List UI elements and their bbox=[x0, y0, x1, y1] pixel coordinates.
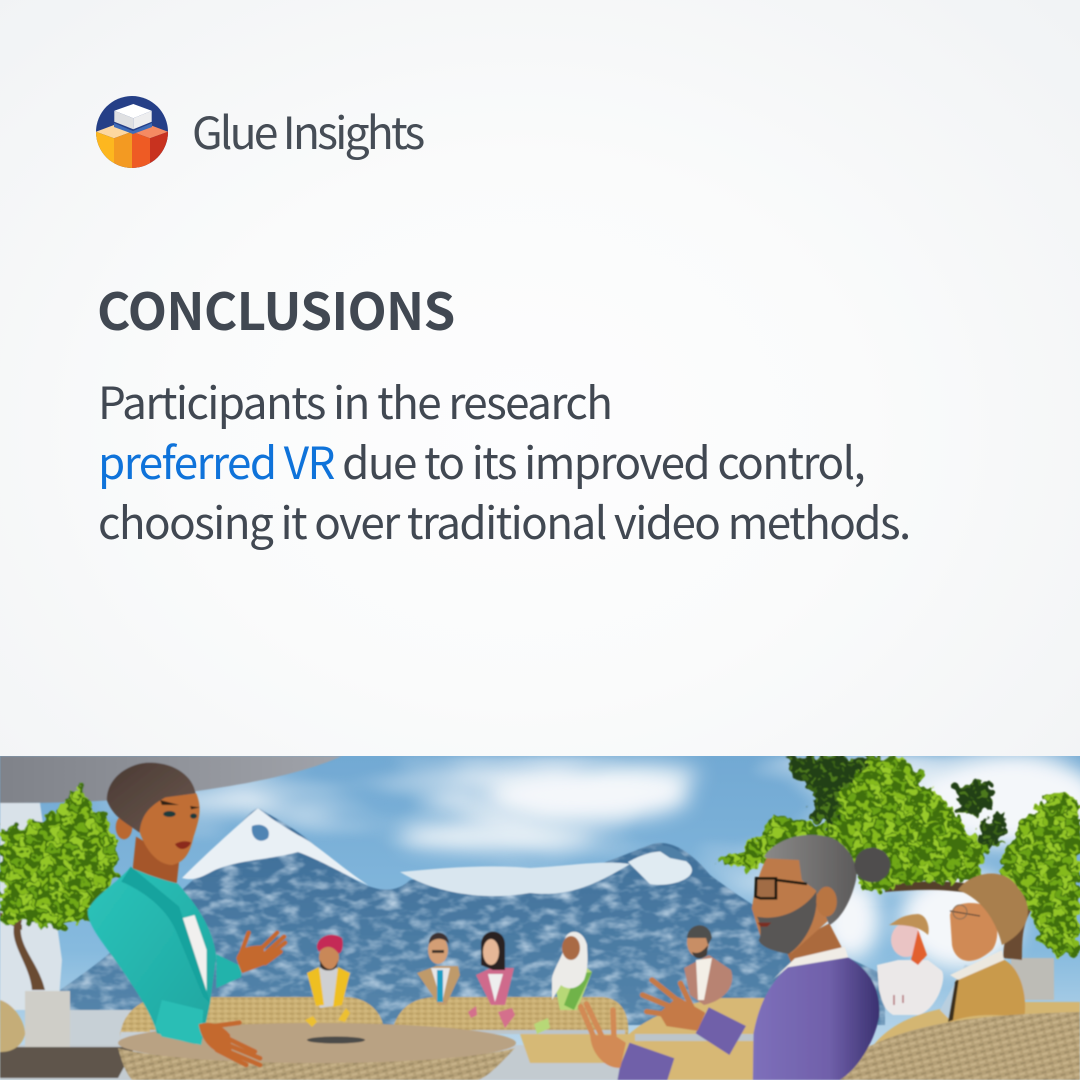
logo icon: Glue Insights cube bbox=[96, 96, 168, 168]
attendee: man with beard bbox=[684, 925, 732, 1005]
hair bbox=[764, 835, 856, 925]
illustration: VR meeting scene bbox=[0, 756, 1080, 1080]
mouth bbox=[758, 923, 771, 927]
heading: conclusions: CONCLUSIONS bbox=[97, 271, 455, 345]
ear bbox=[816, 887, 837, 917]
hair bbox=[107, 763, 196, 833]
attendee: woman in pink bbox=[468, 932, 515, 1028]
speaker: man with glasses and purple jacket bbox=[581, 835, 890, 1080]
wicker benches bbox=[120, 997, 1080, 1080]
right tree bbox=[718, 756, 1080, 960]
lower hand bbox=[200, 1023, 260, 1065]
sleeve 2 bbox=[617, 1043, 674, 1080]
right planter bbox=[1011, 958, 1054, 1000]
hand 2 bbox=[581, 1004, 624, 1067]
cuff lower bbox=[155, 1000, 203, 1045]
ceiling canopy bbox=[0, 756, 342, 803]
left wall bbox=[0, 803, 62, 1010]
bun bbox=[854, 848, 890, 882]
sky with clouds bbox=[0, 754, 1080, 1080]
body text: Participants in the research bbox=[98, 368, 611, 432]
upper hand bbox=[238, 933, 285, 972]
collar bbox=[772, 947, 848, 980]
lapel bbox=[121, 867, 210, 1003]
central table bbox=[118, 1023, 516, 1080]
hand 1 bbox=[643, 980, 704, 1029]
eyes and mouth bbox=[160, 800, 200, 849]
face bbox=[139, 793, 200, 865]
neck bbox=[133, 837, 179, 897]
face bbox=[752, 852, 833, 953]
low wall and floor bbox=[0, 1010, 1080, 1080]
sleeve 1 bbox=[696, 1007, 746, 1055]
foreground wicker bowl bbox=[820, 1012, 1080, 1080]
jacket bbox=[753, 957, 879, 1080]
body text: choosing it over traditional video methods. bbox=[98, 488, 910, 552]
attendee: woman in hijab bbox=[534, 932, 592, 1034]
blazer bbox=[88, 867, 216, 1044]
body text: preferred VR due to its improved control, bbox=[98, 428, 864, 492]
ear bbox=[116, 815, 132, 839]
wicker chair far left bbox=[0, 1000, 25, 1052]
left planter bbox=[25, 991, 70, 1047]
glasses bbox=[756, 878, 807, 898]
left tree bbox=[0, 782, 117, 990]
beard bbox=[757, 892, 817, 954]
sleeve cuff upper bbox=[216, 954, 242, 988]
attendee: man with tie bbox=[417, 933, 460, 1005]
logo wordmark: Glue Insights bbox=[192, 97, 422, 162]
attendee: man with beanie bbox=[948, 873, 1028, 1022]
snow-capped mountains bbox=[60, 808, 885, 1025]
attendee: woman with cap and hoodie bbox=[877, 914, 943, 1015]
shirt bbox=[176, 915, 207, 993]
right mountain sliver bbox=[940, 965, 1011, 1020]
bench seats bbox=[150, 1030, 760, 1041]
body text bbox=[98, 368, 910, 552]
speaker: woman in teal blazer bbox=[88, 763, 285, 1065]
neck bbox=[785, 923, 843, 963]
attendee: turban man bbox=[305, 935, 350, 1027]
